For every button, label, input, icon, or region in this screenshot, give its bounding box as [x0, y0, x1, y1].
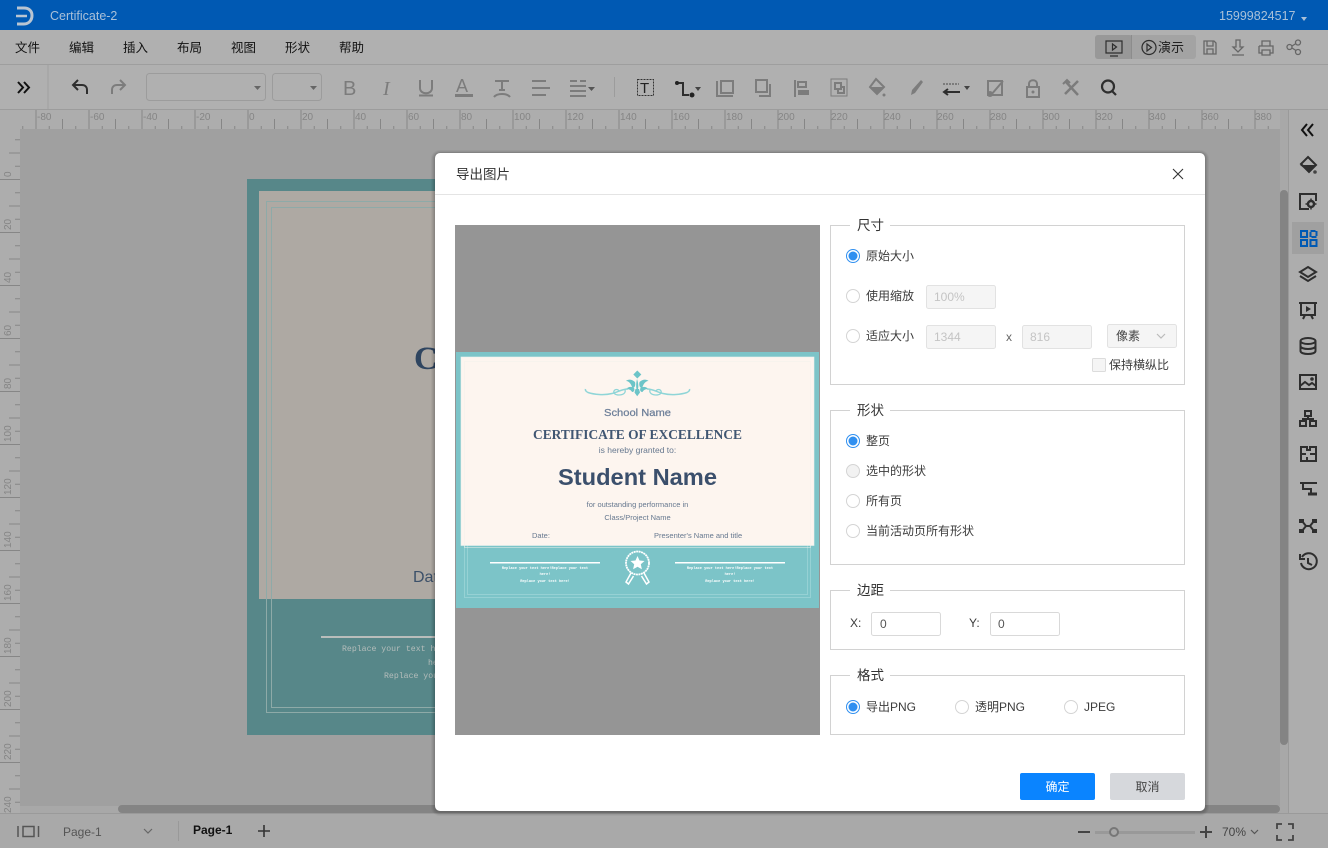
- text box tool: T: [640, 80, 649, 97]
- top title bar: 15999824517: [1219, 9, 1296, 23]
- footer signature right: Replace your text here!: [705, 579, 755, 584]
- certificate preview: CERTIFICATE OF EXCELLENCE: [533, 427, 742, 442]
- background certificate on canvas: CERTIFICATE: [414, 341, 640, 377]
- margin options panel: 0: [880, 617, 887, 631]
- text format icons: B: [343, 78, 356, 100]
- building blocks icon: [1301, 447, 1316, 461]
- top title bar: [0, 0, 1328, 30]
- top ruler: 200: [778, 112, 795, 123]
- expand chevrons: [18, 82, 29, 93]
- format options panel: [830, 668, 1184, 734]
- footer signature left: Replace your text here!: [520, 579, 570, 584]
- export image dialog: [431, 150, 1209, 816]
- layers icon: [1300, 267, 1316, 281]
- left ruler: 160: [3, 584, 14, 601]
- top title bar: Certificate-2: [50, 9, 117, 23]
- certificate preview: Date:: [532, 531, 550, 540]
- radio: fit size: 816: [1030, 330, 1050, 344]
- unit select: [1108, 324, 1176, 348]
- save, download, print and share icons: [1204, 40, 1300, 55]
- top ruler: -80: [37, 112, 52, 123]
- page settings icon: [1300, 194, 1316, 210]
- top ruler: 220: [831, 112, 848, 123]
- background certificate on canvas: [247, 179, 807, 735]
- radio: use scale: 使用缩放: [866, 288, 914, 303]
- top ruler: 120: [567, 112, 584, 123]
- radio: use scale: 100%: [934, 290, 965, 304]
- top ruler: 320: [1096, 112, 1113, 123]
- certificate preview: Student Name: [558, 464, 717, 490]
- shape options panel: [830, 403, 1184, 564]
- text box tool: [638, 80, 654, 97]
- text format icons: A: [456, 76, 468, 96]
- top ruler: 360: [1202, 112, 1219, 123]
- margin options panel: X:: [850, 616, 861, 630]
- top ruler: 280: [990, 112, 1007, 123]
- top ruler: -60: [90, 112, 105, 123]
- canvas scrollbars: [20, 110, 1288, 813]
- certificate preview: Presenter's Name and title: [654, 531, 742, 540]
- left ruler: 80: [3, 377, 14, 389]
- mind map branch icon: [1300, 483, 1317, 494]
- presentation icon: [1299, 303, 1317, 319]
- history icon: [1300, 553, 1317, 569]
- footer signature right: Replace your text here!Replace your text: [687, 566, 773, 571]
- menu bar: 文件: [15, 40, 40, 55]
- top ruler: 140: [620, 112, 637, 123]
- shape options panel: 整页: [866, 433, 890, 448]
- unit select: 像素: [1116, 329, 1140, 343]
- top ruler: 80: [461, 112, 473, 123]
- keep aspect ratio checkbox: 保持横纵比: [1109, 357, 1169, 372]
- shuffle icon: [1300, 520, 1316, 532]
- dialog title: 导出图片: [456, 167, 510, 182]
- radio: original size: 原始大小: [866, 249, 914, 263]
- radio: use scale: [846, 286, 996, 308]
- zoom controls: [1078, 824, 1293, 840]
- top ruler: 60: [408, 112, 420, 123]
- cancel button: [1110, 773, 1185, 800]
- font size select: [272, 74, 322, 100]
- arrange and style tools: [717, 79, 1078, 97]
- shape options panel: 选中的形状: [866, 463, 926, 478]
- margin options panel: [830, 583, 1184, 650]
- app logo: [16, 8, 32, 24]
- bottom status bar: Page-1: [63, 825, 102, 839]
- left ruler: 120: [3, 478, 14, 495]
- preview panel: [455, 225, 820, 735]
- margin options panel: Y:: [969, 616, 980, 630]
- text format icons: I: [382, 78, 391, 100]
- shape options panel: 所有页: [866, 494, 902, 508]
- cancel button: 取消: [1135, 780, 1160, 794]
- certificate preview: Class/Project Name: [604, 513, 671, 522]
- footer signature left: here!: [540, 572, 550, 577]
- background certificate on canvas: Replace your text: [384, 671, 468, 681]
- footer signature right: [675, 562, 785, 584]
- search icon: [1102, 80, 1116, 95]
- font family select: [146, 74, 266, 100]
- certificate preview: is hereby granted to:: [599, 445, 676, 455]
- shapes grid icon: [1301, 231, 1316, 246]
- size options panel: [830, 218, 1184, 384]
- shape options panel: 形状: [857, 403, 884, 418]
- top ruler: [0, 110, 1280, 129]
- page view icon: [18, 826, 38, 837]
- menu bar: 帮助: [339, 41, 364, 55]
- text format icons: [343, 76, 595, 100]
- top ruler: 240: [884, 112, 901, 123]
- menu bar: 视图: [231, 40, 256, 55]
- radio: fit size: 1344: [934, 330, 961, 344]
- certificate preview: School Name: [604, 407, 671, 419]
- add page: [258, 825, 270, 837]
- org chart icon: [1300, 411, 1316, 426]
- certificate preview: [456, 352, 819, 608]
- footer signature left: [490, 562, 600, 584]
- radio: fit size: 适应大小: [866, 328, 914, 343]
- image icon: [1300, 375, 1316, 389]
- top ruler: 340: [1149, 112, 1166, 123]
- connector tool: [675, 81, 701, 98]
- left ruler: [0, 129, 20, 813]
- radio: fit size: [846, 326, 1092, 348]
- bottom status bar: [0, 813, 1328, 848]
- menu bar: 布局: [177, 41, 202, 55]
- bottom status bar: Page-1: [193, 823, 233, 837]
- left ruler: 140: [3, 531, 14, 548]
- medal badge: [626, 552, 649, 584]
- ornament: [585, 370, 690, 396]
- top ruler: 100: [514, 112, 531, 123]
- top ruler: 160: [673, 112, 690, 123]
- menu bar: 编辑: [69, 40, 94, 55]
- zoom controls: 70%: [1222, 825, 1246, 839]
- confirm button: [1020, 773, 1095, 800]
- menu bar: 插入: [123, 41, 149, 55]
- shape options panel: 当前活动页所有形状: [866, 523, 974, 538]
- top ruler: -20: [196, 112, 211, 123]
- right sidebar: [1288, 110, 1328, 813]
- margin options panel: 边距: [857, 583, 884, 598]
- left ruler: 240: [3, 796, 14, 813]
- top ruler: 300: [1043, 112, 1060, 123]
- format options panel: JPEG: [1084, 700, 1115, 714]
- format options panel: 导出PNG: [866, 700, 916, 714]
- confirm button: 确定: [1045, 779, 1070, 794]
- background certificate on canvas: Date:: [413, 569, 451, 586]
- top ruler: -40: [143, 112, 158, 123]
- left ruler: 220: [3, 743, 14, 760]
- database icon: [1300, 338, 1316, 354]
- format options panel: 透明PNG: [975, 700, 1025, 714]
- collapse chevrons: [1302, 124, 1313, 136]
- present button group: 演示: [1158, 40, 1184, 55]
- footer signature right: here!: [725, 572, 735, 577]
- menu bar: 形状: [285, 41, 311, 55]
- top ruler: 180: [726, 112, 743, 123]
- fill icon: [1300, 157, 1317, 174]
- close icon: [1173, 169, 1183, 179]
- top ruler: 0: [249, 112, 255, 123]
- background certificate on canvas: Replace your text here: [342, 644, 450, 654]
- background certificate on canvas: here: [428, 658, 448, 668]
- margin options panel: 0: [998, 617, 1005, 631]
- left ruler: 180: [3, 637, 14, 654]
- left ruler: 100: [3, 425, 14, 442]
- left ruler: 200: [3, 690, 14, 707]
- footer signature left: Replace your text here!Replace your text: [502, 566, 588, 571]
- toolbar: [0, 65, 1328, 110]
- undo and redo: [73, 80, 87, 94]
- radio: fit size: x: [1006, 330, 1012, 344]
- left ruler: 20: [3, 218, 14, 230]
- format options panel: 格式: [857, 668, 884, 683]
- top ruler: 40: [355, 112, 367, 123]
- size options panel: 尺寸: [857, 218, 884, 233]
- menu bar: [0, 30, 1328, 65]
- certificate preview: for outstanding performance in: [587, 500, 688, 509]
- left ruler: 60: [3, 324, 14, 336]
- left ruler: 40: [3, 271, 14, 283]
- present button group: [1095, 35, 1196, 59]
- left ruler: 0: [3, 171, 14, 177]
- top ruler: 20: [302, 112, 314, 123]
- top ruler: 260: [937, 112, 954, 123]
- top ruler: 380: [1255, 112, 1272, 123]
